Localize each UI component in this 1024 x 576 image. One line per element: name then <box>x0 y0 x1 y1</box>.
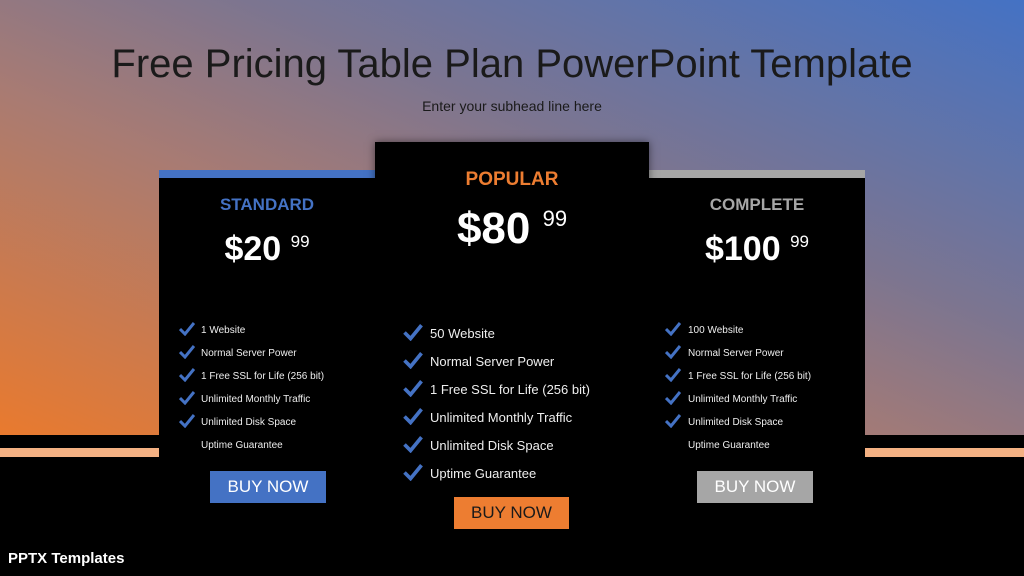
button: complete: BUY NOW <box>715 477 795 496</box>
panel: complete <box>649 170 865 465</box>
features: complete: Normal Server Power <box>688 348 784 359</box>
features: popular: 50 Website <box>430 326 495 341</box>
features: standard: 1 Free SSL for Life (256 bit) <box>201 371 324 382</box>
features: popular: 1 Free SSL for Life (256 bit) <box>430 382 590 397</box>
button: standard: BUY NOW <box>228 477 308 496</box>
footer brand: PPTX Templates <box>8 550 124 567</box>
panel: standard <box>159 170 375 465</box>
button: popular: BUY NOW <box>471 503 552 522</box>
features: standard: Normal Server Power <box>201 348 297 359</box>
features: complete: 100 Website <box>688 325 743 336</box>
features: standard: Unlimited Monthly Traffic <box>201 394 310 405</box>
title: Free Pricing Table Plan PowerPoint Template <box>111 42 913 86</box>
features: complete: Unlimited Disk Space <box>688 417 783 428</box>
features: complete: Unlimited Monthly Traffic <box>688 394 797 405</box>
features: complete: Uptime Guarantee <box>688 440 770 451</box>
features: popular: Uptime Guarantee <box>430 466 536 481</box>
button: popular <box>454 497 569 529</box>
peach stripe right <box>865 448 1024 457</box>
price: complete: $100 99 <box>705 230 809 268</box>
peach stripe left <box>0 448 159 457</box>
price: standard: $20 99 <box>224 230 310 268</box>
features: popular: Unlimited Monthly Traffic <box>430 410 572 425</box>
features: standard: Uptime Guarantee <box>201 440 283 451</box>
features: standard: 1 Website <box>201 325 245 336</box>
features: popular: Unlimited Disk Space <box>430 438 554 453</box>
button: standard <box>210 471 326 503</box>
features: popular: Normal Server Power <box>430 354 554 369</box>
panel: popular <box>375 142 649 472</box>
heading: standard: STANDARD <box>220 195 314 214</box>
features: standard: Unlimited Disk Space <box>201 417 296 428</box>
features: complete: 1 Free SSL for Life (256 bit) <box>688 371 811 382</box>
subhead: Enter your subhead line here <box>422 98 602 114</box>
features: standard <box>179 322 324 451</box>
heading: popular: POPULAR <box>466 169 558 190</box>
heading: complete: COMPLETE <box>710 195 804 214</box>
features: popular <box>403 324 590 481</box>
features: complete <box>665 322 811 451</box>
price: popular: $80 99 <box>457 204 567 253</box>
button: complete <box>697 471 813 503</box>
